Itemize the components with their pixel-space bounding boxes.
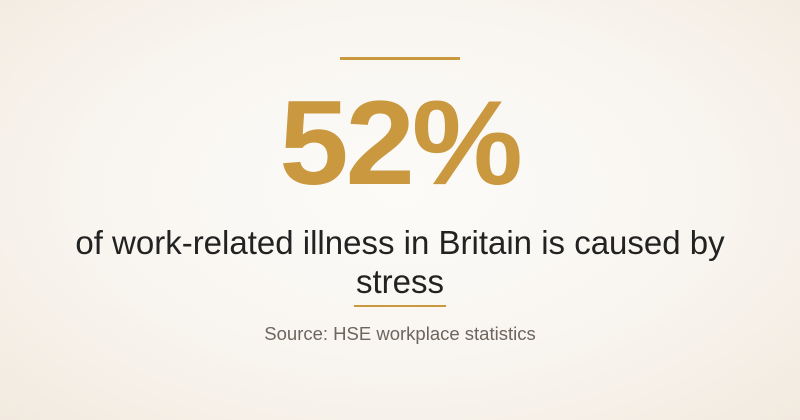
description text: of work-related illness in Britain is caused by (75, 224, 725, 261)
description text (75, 224, 725, 307)
headline statistic: 52% (279, 76, 520, 210)
description text: stress (356, 263, 444, 300)
source note: Source: HSE workplace statistics (264, 323, 536, 344)
decorative top rule (340, 57, 460, 60)
